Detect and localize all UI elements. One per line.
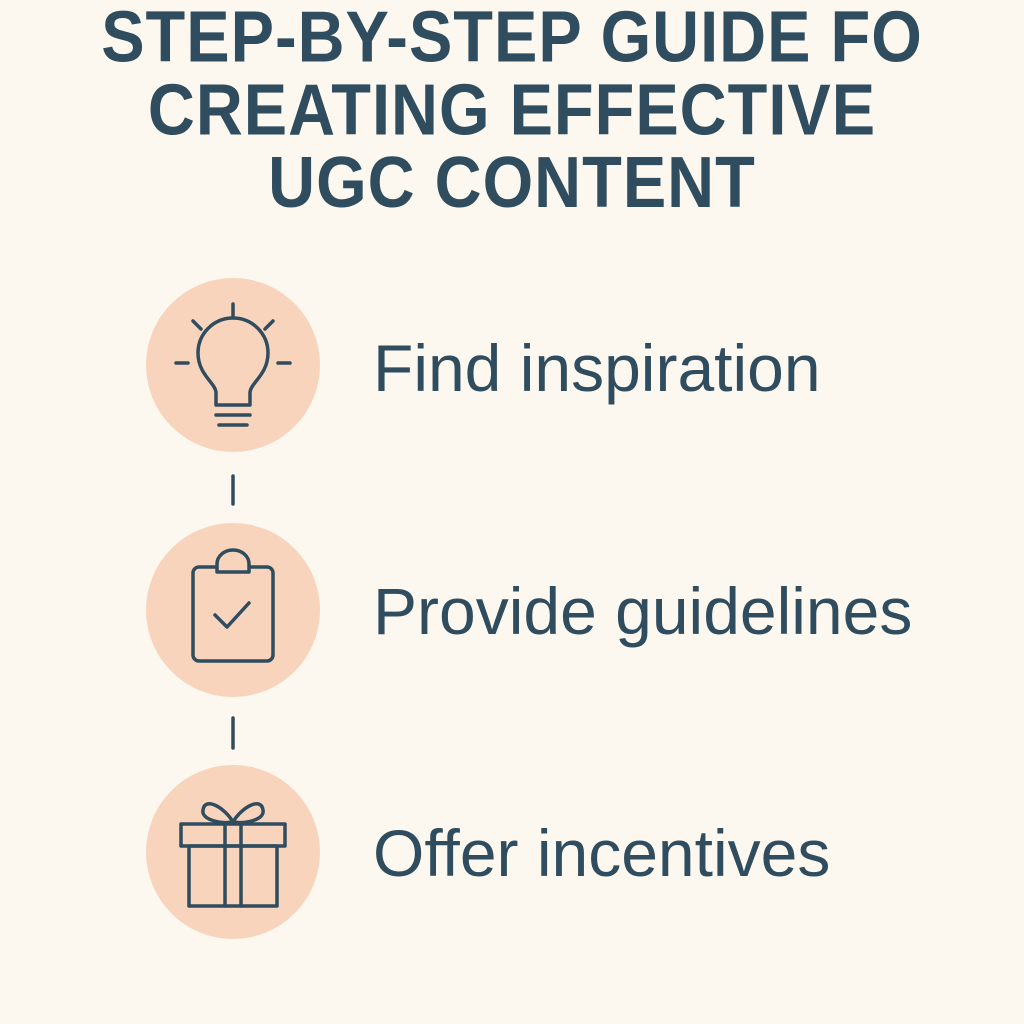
title: CREATING EFFECTIVE (148, 68, 876, 150)
title: UGC CONTENT (268, 141, 756, 223)
icon: gift (146, 765, 320, 939)
connector (231, 718, 235, 748)
step 2 label: Provide guidelines (373, 574, 912, 648)
step 1 label: Find inspiration (373, 331, 821, 405)
step 3 label: Offer incentives (373, 816, 830, 890)
icon: clipboard (146, 523, 320, 697)
icon: lightbulb (146, 278, 320, 452)
connector (231, 476, 235, 504)
title (101, 0, 923, 223)
